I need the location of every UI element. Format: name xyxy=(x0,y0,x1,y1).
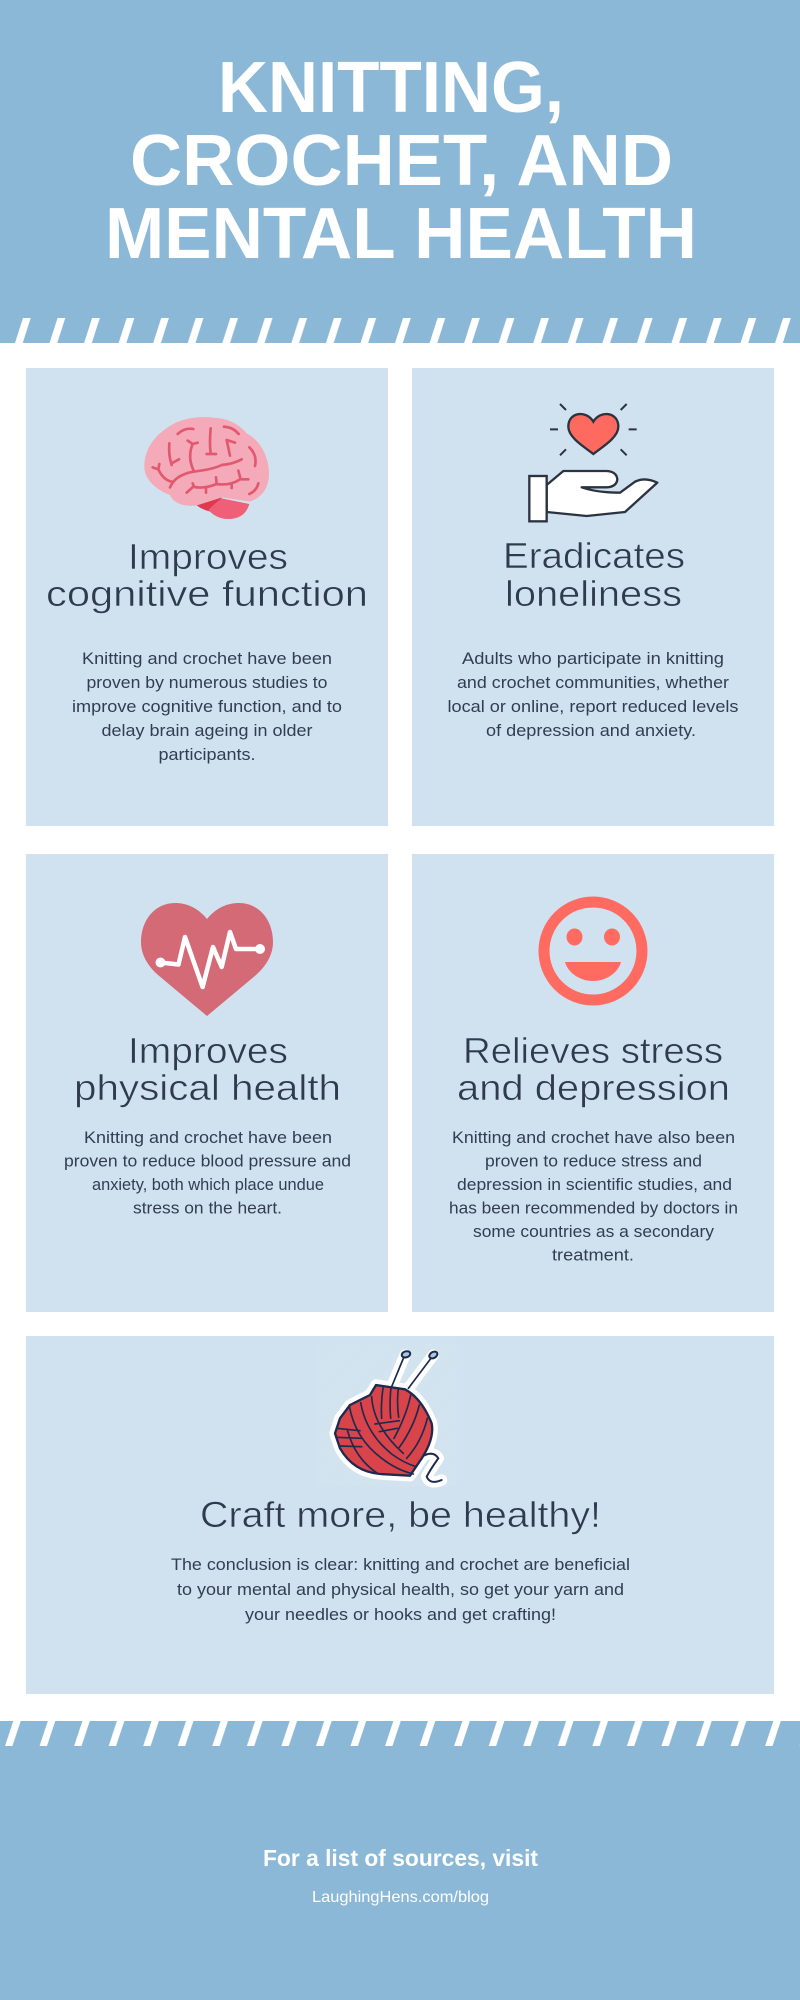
heading xyxy=(74,1030,341,1108)
heading: Craft more, be healthy! xyxy=(200,1494,601,1535)
body text: Knitting and crochet have been xyxy=(82,650,332,668)
body text: treatment. xyxy=(552,1246,634,1264)
icon: heart in hand xyxy=(529,404,657,521)
title: MENTAL HEALTH xyxy=(105,194,697,274)
body text: delay brain ageing in older xyxy=(102,722,313,740)
icon: smiley face xyxy=(544,902,642,1000)
heading: Improves xyxy=(128,1030,288,1071)
body text: proven to reduce blood pressure and xyxy=(64,1152,351,1170)
panel: cognitive function xyxy=(26,368,388,826)
body text: depression in scientific studies, and xyxy=(457,1176,732,1194)
body text: proven by numerous studies to xyxy=(86,674,328,692)
heading: loneliness xyxy=(505,573,682,614)
panel: loneliness xyxy=(412,368,774,826)
body text: your needles or hooks and get crafting! xyxy=(245,1606,556,1624)
body text: and crochet communities, whether xyxy=(457,674,730,692)
heading xyxy=(46,536,368,614)
panel: stress and depression xyxy=(412,854,774,1312)
body text: participants. xyxy=(158,746,256,764)
body text: Knitting and crochet have been xyxy=(84,1129,332,1147)
body text: of depression and anxiety. xyxy=(486,722,696,740)
panel: physical health xyxy=(26,854,388,1312)
body text: to your mental and physical health, so get your yarn and xyxy=(177,1581,624,1599)
body text: has been recommended by doctors in xyxy=(449,1200,738,1218)
heading: physical health xyxy=(74,1067,341,1108)
body text: Knitting and crochet have also been xyxy=(452,1129,735,1147)
icon: heart with pulse xyxy=(141,903,273,1016)
body text xyxy=(72,650,342,764)
body text: Adults who participate in knitting xyxy=(462,650,724,668)
heading xyxy=(457,1030,730,1108)
icon: brain xyxy=(144,417,269,519)
body text: local or online, report reduced levels xyxy=(448,698,738,716)
header band xyxy=(0,0,800,343)
footer link: LaughingHens.com/blog xyxy=(312,1889,489,1906)
heading xyxy=(503,535,685,614)
title xyxy=(105,48,697,274)
body text xyxy=(449,1129,738,1264)
panel: conclusion xyxy=(26,1336,774,1694)
body text: some countries as a secondary xyxy=(473,1223,715,1241)
body text xyxy=(64,1129,351,1218)
footer band xyxy=(0,1721,800,2000)
footer heading: For a list of sources, visit xyxy=(263,1845,538,1871)
body text: proven to reduce stress and xyxy=(485,1152,702,1170)
heading: Improves xyxy=(128,536,288,577)
heading: and depression xyxy=(457,1067,730,1108)
title: CROCHET, AND xyxy=(130,121,673,201)
title: KNITTING, xyxy=(218,48,564,128)
body text: improve cognitive function, and to xyxy=(72,698,342,716)
body text: The conclusion is clear: knitting and crochet are beneficial xyxy=(171,1556,630,1574)
heading: cognitive function xyxy=(46,573,368,614)
icon: yarn ball with needles xyxy=(317,1343,457,1487)
body text xyxy=(171,1556,630,1624)
body text xyxy=(448,650,738,740)
body text: stress on the heart. xyxy=(133,1200,282,1218)
heading: Relieves stress xyxy=(463,1030,723,1071)
body text: anxiety, both which place undue xyxy=(92,1176,324,1194)
heading: Eradicates xyxy=(503,535,685,576)
